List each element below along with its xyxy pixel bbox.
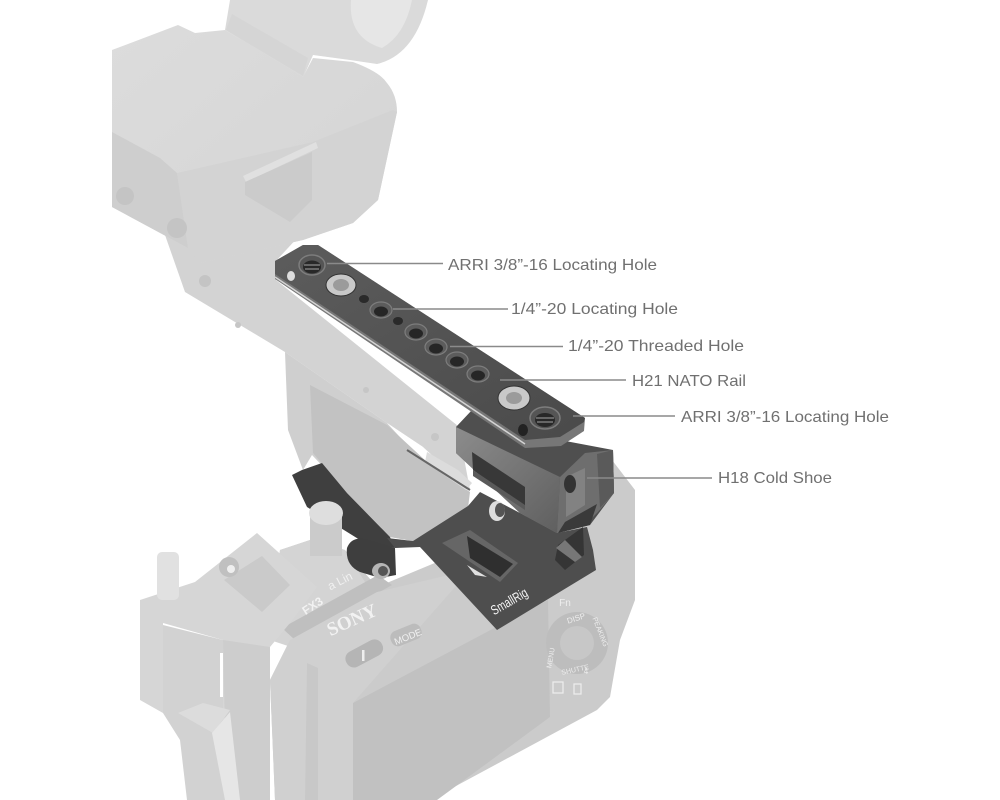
thumb screw	[157, 552, 179, 600]
hole threads	[374, 306, 485, 380]
ghosted grey knob post	[309, 501, 343, 556]
control dial: 4	[584, 667, 589, 676]
ghosted cylinder mount	[225, 0, 428, 78]
label: ARRI locating hole bottom: ARRI 3/8”-16 Locating Hole	[681, 409, 889, 426]
end 3/8 hole 2	[530, 407, 560, 429]
ghosted left rig cage	[140, 533, 317, 800]
FX3 label: FX3	[300, 594, 326, 618]
label: H18 cold shoe: H18 Cold Shoe	[718, 470, 832, 487]
arm plate	[387, 492, 596, 630]
control dial: SHUTTE	[561, 664, 590, 677]
camera mode switch	[343, 637, 386, 670]
camera mode button	[388, 622, 424, 648]
control dial: DISP	[566, 611, 586, 626]
cold shoe end face	[557, 450, 614, 533]
block window	[472, 452, 525, 508]
upper metal block	[456, 410, 614, 533]
dark metal lower bracket	[347, 492, 596, 630]
label: 1/4-20 threaded hole: 1/4”-20 Threaded Hole	[568, 338, 744, 355]
SONY logo: SONY	[324, 600, 381, 641]
leader lines	[327, 264, 712, 478]
knob	[347, 539, 396, 579]
camera mode button: MODE	[393, 627, 423, 648]
ghosted handle arm and grip	[165, 235, 472, 541]
top NATO rail	[275, 245, 585, 448]
bolts	[326, 274, 356, 296]
ghosted top handle box	[112, 25, 397, 263]
control dial: MENU	[546, 647, 557, 669]
label: H21 NATO rail: H21 NATO Rail	[632, 373, 746, 390]
end 3/8 hole	[299, 255, 325, 275]
locating slots	[287, 271, 295, 281]
ghosted camera body	[270, 460, 635, 800]
silver screw	[489, 501, 505, 521]
control dial: PEAKING	[590, 616, 609, 648]
Cinema Line label: a Lin	[325, 569, 355, 593]
label: 1/4-20 locating hole: 1/4”-20 Locating Hole	[511, 301, 678, 318]
second window	[555, 527, 584, 570]
control dial	[546, 598, 609, 694]
1/4-20 holes	[370, 302, 489, 382]
dark metal rear tab	[292, 463, 395, 548]
square window	[442, 530, 518, 582]
label: ARRI locating hole top: ARRI 3/8”-16 Locating Hole	[448, 257, 657, 274]
small pin holes	[359, 295, 369, 303]
SmallRig logo: SmallRig	[488, 585, 530, 618]
control dial: Fn	[559, 598, 571, 609]
